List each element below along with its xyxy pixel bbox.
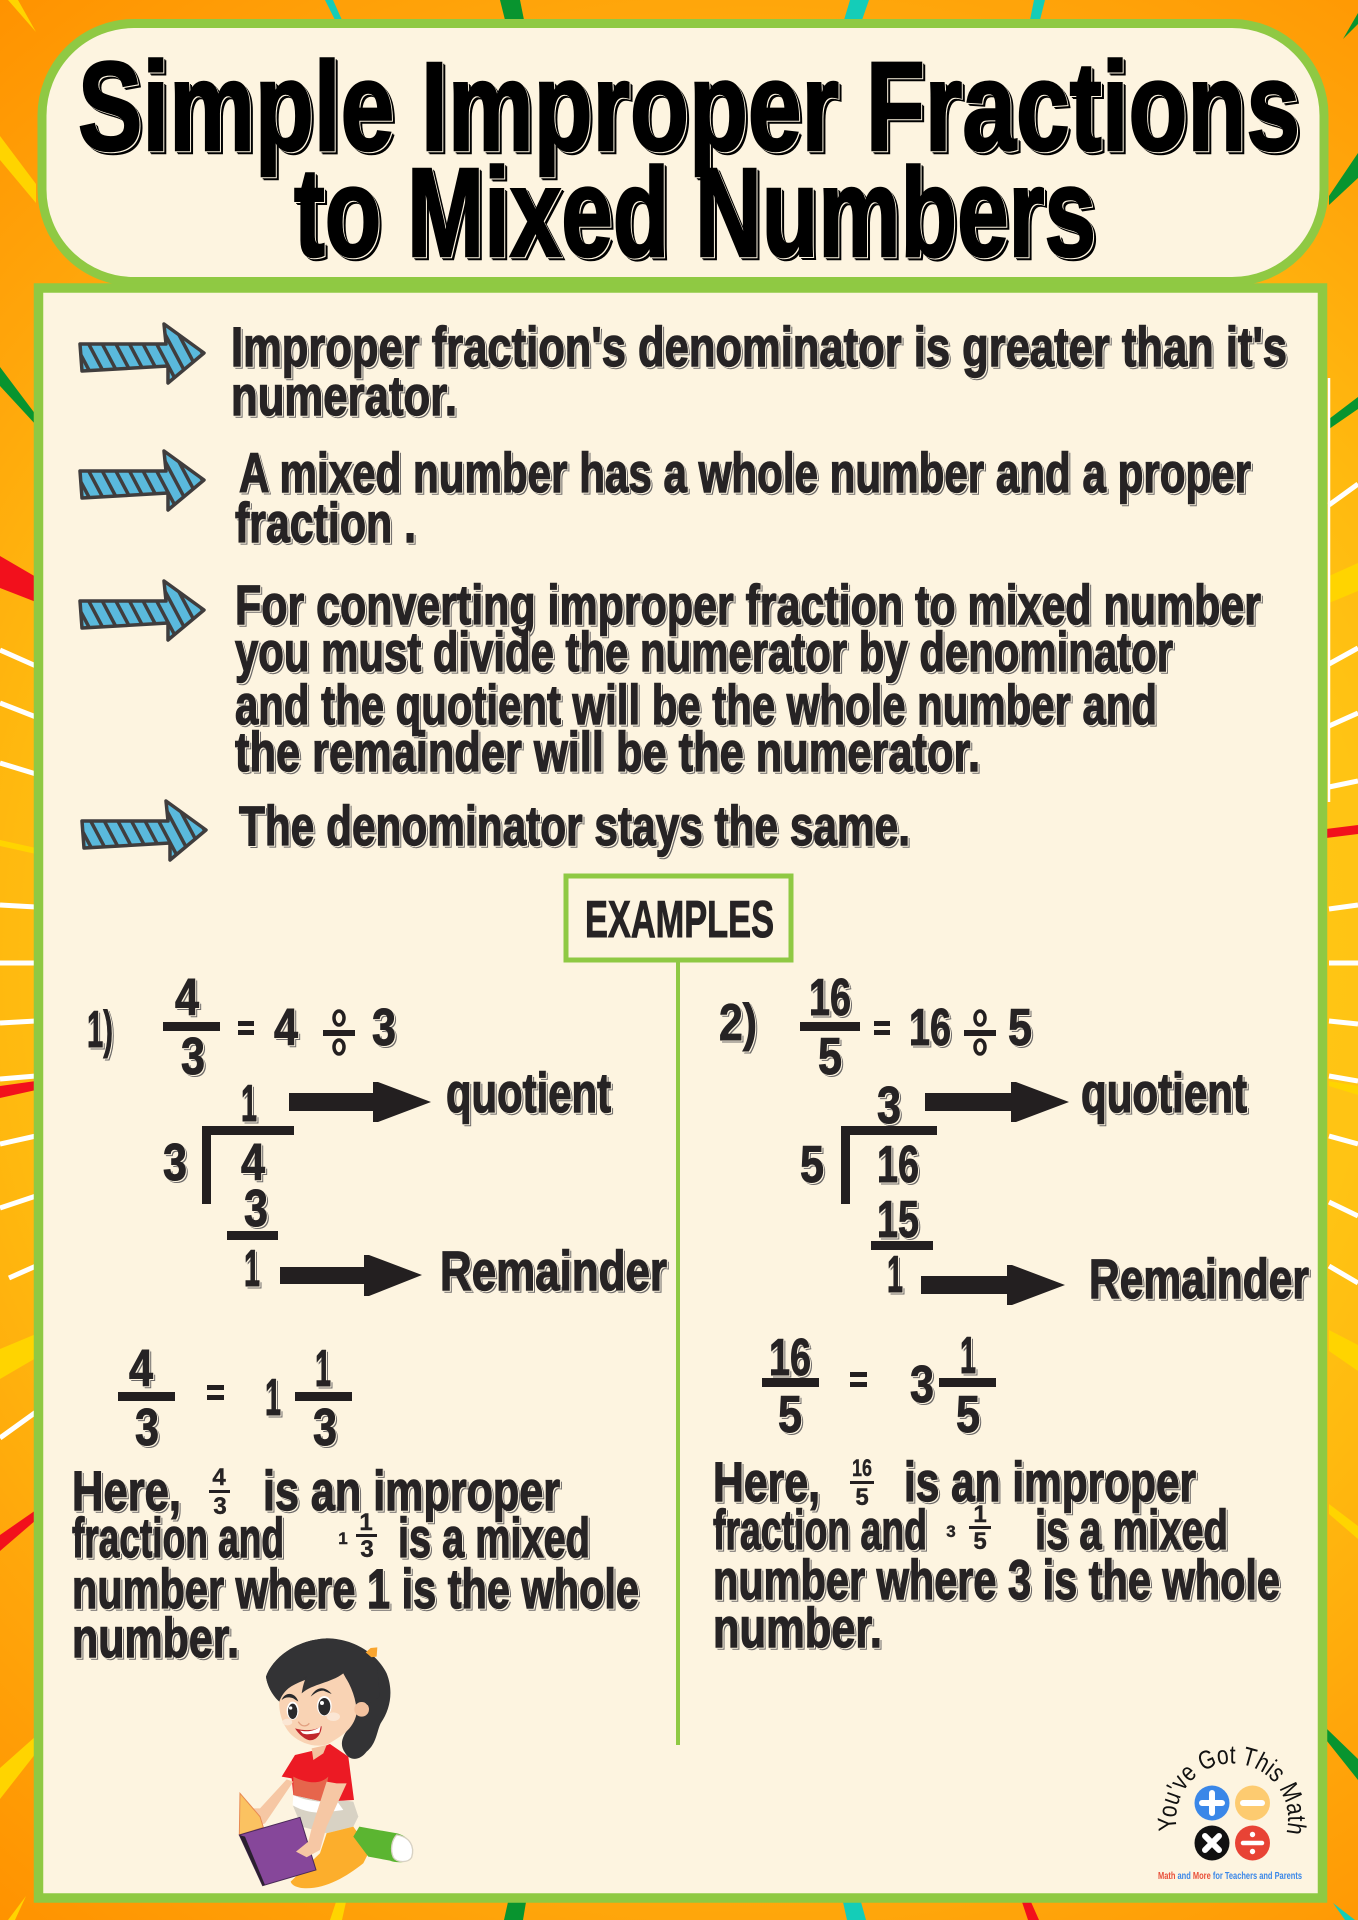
bullet 1 text: numerator. xyxy=(231,364,457,427)
long division xyxy=(800,1077,937,1304)
result 16/5 = 3 1/5: 16 xyxy=(769,1329,811,1387)
quotient label: quotient xyxy=(1081,1061,1247,1124)
long division: 3 xyxy=(877,1077,901,1135)
equals 16 divided by 5: 5 xyxy=(1008,999,1032,1057)
icon: blue arrow 3 xyxy=(80,581,204,640)
examples heading box: EXAMPLES xyxy=(585,891,774,949)
example 1 explanation: number. xyxy=(72,1606,239,1669)
result 16/5 = 3 1/5: 3 xyxy=(910,1356,934,1414)
bullet 2 text xyxy=(235,441,1251,554)
long division: 15 xyxy=(877,1191,919,1249)
fraction 16 over 5: 16 xyxy=(809,969,851,1027)
example 2 explanation: 5 xyxy=(855,1484,869,1511)
example 2 explanation: 16 xyxy=(852,1455,872,1482)
equals 4 divided by 3: 4 xyxy=(274,999,298,1057)
example 1 explanation: 1 xyxy=(359,1509,373,1536)
logo tagline: Math and More for Teachers and Parents xyxy=(1158,1870,1302,1882)
icon: plus xyxy=(1194,1786,1230,1820)
example 2 working xyxy=(713,969,1309,1659)
fraction 16 over 5 xyxy=(800,969,860,1086)
example 1 explanation: 3 xyxy=(360,1536,374,1563)
example 1 explanation: number where 1 is the whole xyxy=(72,1557,639,1620)
example 2 explanation: 5 xyxy=(973,1528,987,1555)
example 1 explanation: 4 xyxy=(212,1464,226,1491)
quotient label: quotient xyxy=(446,1061,611,1124)
example 1 explanation: 3 xyxy=(213,1493,227,1520)
long division: 1 xyxy=(241,1075,257,1133)
title panel xyxy=(42,24,1324,283)
arrow to remainder xyxy=(921,1265,1065,1305)
result 16/5 = 3 1/5 xyxy=(762,1327,996,1444)
example 2 explanation xyxy=(713,1450,1280,1659)
centre divider line xyxy=(676,961,680,1745)
long division: 1 xyxy=(887,1246,903,1304)
long division: 4 xyxy=(241,1134,265,1192)
icon: minus xyxy=(1235,1786,1270,1820)
example number 1: 1) xyxy=(87,1001,113,1059)
example number 2: 2) xyxy=(719,994,757,1052)
arrow to remainder xyxy=(280,1255,422,1296)
result 4/3 = 1 1/3 xyxy=(118,1340,352,1457)
fraction 4 over 3: 4 xyxy=(175,969,199,1027)
fraction 16 over 5: 5 xyxy=(818,1028,842,1086)
icon: blue arrow 4 xyxy=(82,801,206,860)
title line 2: to Mixed Numbers xyxy=(294,142,1096,283)
equals 16 divided by 5 xyxy=(874,999,1032,1057)
example 2 explanation: 1 xyxy=(973,1501,987,1528)
example 1 explanation: 1 xyxy=(338,1529,348,1548)
example 2 explanation: Here, xyxy=(713,1450,820,1513)
long division: 1 xyxy=(244,1240,260,1298)
icon: blue arrow 2 xyxy=(80,451,204,510)
result 4/3 = 1 1/3: 1 xyxy=(315,1340,331,1398)
example 1 explanation: fraction and xyxy=(72,1506,284,1569)
remainder label: Remainder xyxy=(440,1239,667,1302)
example 2 explanation: 3 xyxy=(946,1522,956,1541)
result 4/3 = 1 1/3: 3 xyxy=(135,1399,159,1457)
bullet 1 text xyxy=(231,315,1287,427)
result 16/5 = 3 1/5: 5 xyxy=(778,1386,802,1444)
long division xyxy=(163,1075,294,1298)
result 16/5 = 3 1/5: 5 xyxy=(956,1386,980,1444)
equals 4 divided by 3 xyxy=(238,999,396,1057)
long division: 5 xyxy=(800,1136,824,1194)
result 4/3 = 1 1/3: 1 xyxy=(265,1369,281,1427)
bullet 3 text: the remainder will be the numerator. xyxy=(235,720,980,783)
icon: times xyxy=(1194,1826,1230,1860)
icon: blue arrow 1 xyxy=(80,324,204,383)
result 4/3 = 1 1/3: 3 xyxy=(313,1399,337,1457)
illustration: girl reading a book xyxy=(239,1638,413,1888)
bullet 4 text: The denominator stays the same. xyxy=(239,794,910,857)
logo arc text: You've Got This Math xyxy=(1158,1746,1307,1834)
example 1 explanation xyxy=(72,1459,639,1669)
fraction 4 over 3: 3 xyxy=(181,1028,205,1086)
long division: 3 xyxy=(163,1134,187,1192)
example 2 explanation: is a mixed xyxy=(1035,1498,1228,1561)
result 4/3 = 1 1/3: 4 xyxy=(129,1340,153,1398)
logo: You've Got This Math xyxy=(1158,1746,1307,1882)
example 2 explanation: fraction and xyxy=(713,1498,927,1561)
result 16/5 = 3 1/5: 1 xyxy=(960,1327,976,1385)
bullet 3 text xyxy=(235,573,1261,783)
arrow to quotient xyxy=(289,1082,431,1122)
example 2 explanation: is an improper xyxy=(904,1450,1196,1513)
arrow to quotient xyxy=(925,1082,1069,1122)
example 2 explanation: number. xyxy=(713,1596,882,1659)
bullet 2 text: fraction . xyxy=(235,491,416,554)
example 1 explanation: Here, xyxy=(72,1459,181,1522)
examples heading box xyxy=(566,876,791,960)
example 1 working xyxy=(72,969,667,1669)
example 1 explanation: is an improper xyxy=(263,1459,560,1522)
long division: 16 xyxy=(877,1136,919,1194)
equals 16 divided by 5: 16 xyxy=(909,999,951,1057)
equals 4 divided by 3: 3 xyxy=(372,999,396,1057)
icon: divide xyxy=(1235,1826,1270,1860)
fraction 4 over 3 xyxy=(163,969,220,1086)
example 1 explanation: is a mixed xyxy=(398,1506,590,1569)
long division: 3 xyxy=(244,1180,268,1238)
